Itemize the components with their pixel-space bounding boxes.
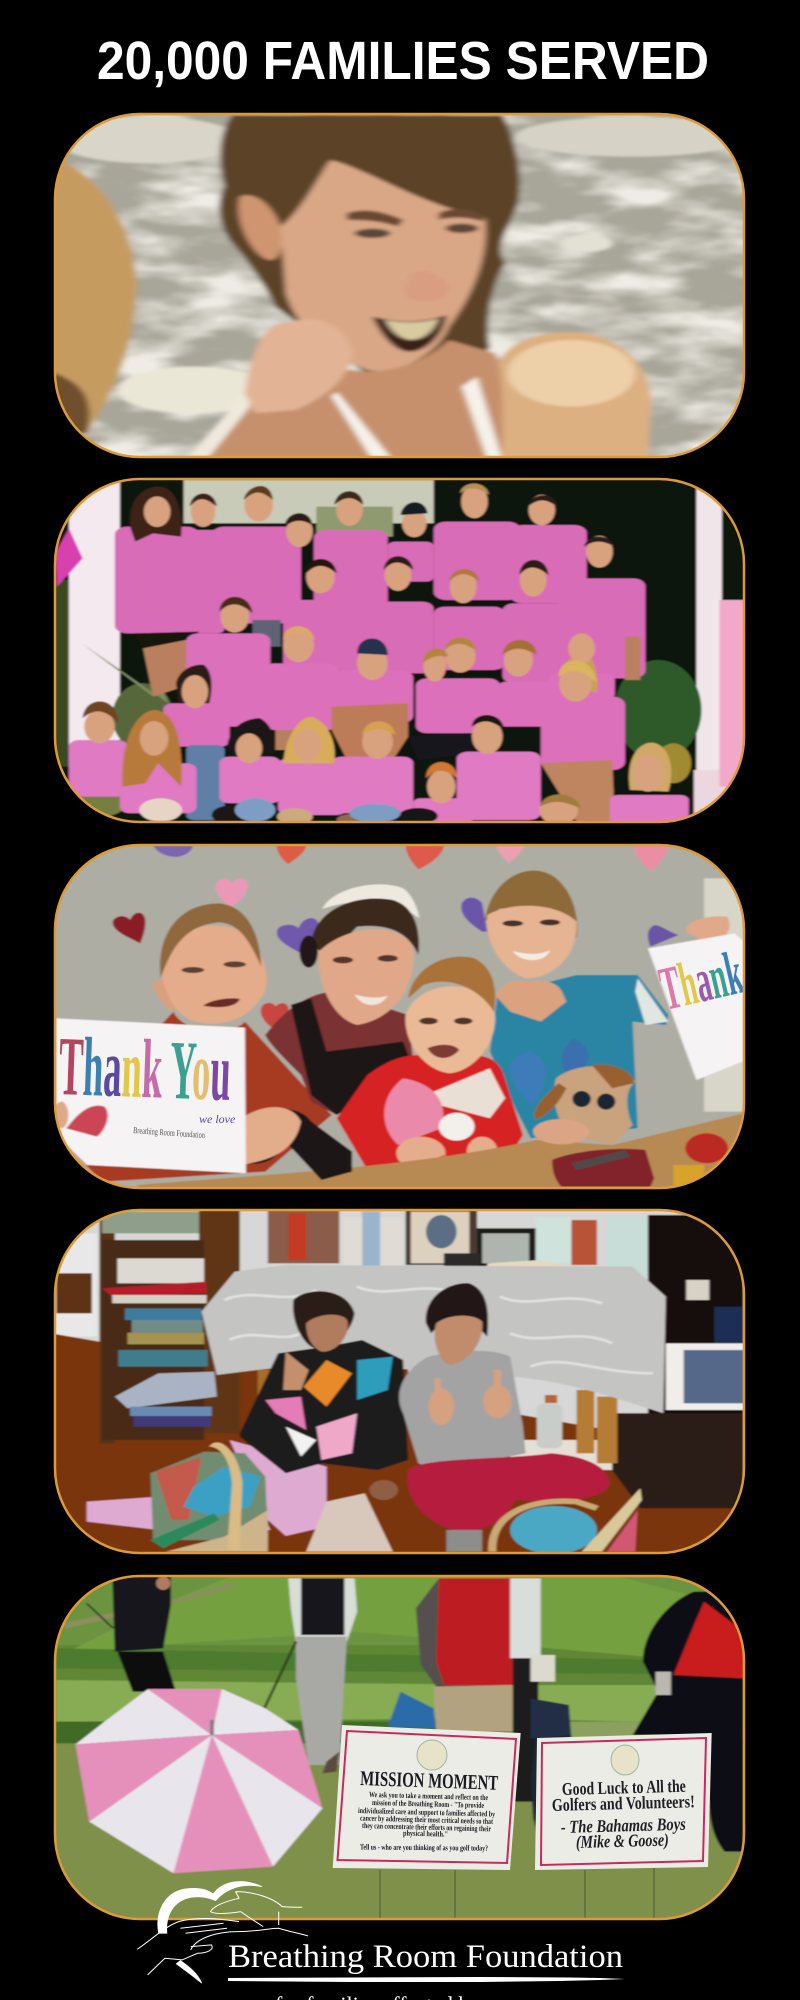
boy on left [56,903,332,1182]
left blurred figure [46,157,137,433]
older girl in teal [485,871,730,1138]
knees and jeans [186,703,615,822]
woman [189,115,520,460]
panel: photo of smiling woman on beach [46,110,760,463]
panel: golf outing with pink umbrella and signs [51,1572,750,1923]
front row children [69,740,689,828]
logo brush underline [228,1977,625,1982]
blond child [490,332,651,460]
shrine items on table [266,1211,648,1278]
title: 20,000 FAMILIES SERVED [97,31,709,91]
sign: mission moment: Tell us - who are you thinking of as you golf today? [360,1843,488,1853]
right gift basket [446,1488,642,1554]
long hair shapes [122,487,671,792]
paper hearts on wall [113,845,679,1028]
right sign paper [648,933,744,1080]
toddler [337,957,523,1170]
girl in patterned hoodie [87,1291,408,1536]
sign: mission moment: they can concentrate their efforts on regaining their [362,1821,491,1833]
sign stakes [380,1868,654,1919]
right thank lettering: Thank [654,939,749,1024]
sign: mission moment: mission of the Breathing Room - "To provide [372,1798,484,1810]
sign: mission moment: cancer by addressing their most critical needs so that [360,1814,493,1826]
water bottle [537,1395,562,1448]
thank you lettering: Thank You [57,1020,232,1119]
sign text: foundation name: Breathing Room Foundation [133,1125,206,1140]
girl in grey shirt [399,1283,610,1532]
middle row children [163,633,625,770]
panel: two girls giving thumbs up with gift baskets [51,1207,750,1557]
porch columns and pink banners [55,480,745,823]
short hair caps [83,484,615,808]
dark cabinet [612,1215,744,1508]
left gift basket [151,1442,268,1552]
sign: good luck: Good Luck to All the [562,1776,686,1799]
logo: heart and hands [137,1881,308,1983]
sign text: we love you: we love [199,1112,236,1126]
notebook on floor [306,1493,393,1552]
sign: mission moment: individualized care and support to families affected by [358,1806,495,1819]
sign: good luck: (Mike & Goose) [576,1830,669,1853]
left sign paper [54,1018,246,1173]
sign: mission moment: We ask you to take a moment and reflect on the [369,1790,488,1802]
legs and shorts [135,620,640,697]
sign: good luck [535,1733,712,1870]
sign: mission moment: physical health." [403,1829,448,1839]
bookshelf [99,1210,240,1443]
sign: mission moment [333,1725,521,1870]
panel: group photo of kids in pink shirts [51,477,750,828]
golfers [87,1577,744,1852]
panel borders [55,114,744,1919]
umbrella [76,1689,322,1873]
plush dog toy [533,1064,635,1145]
faces [84,485,663,825]
girl in centre [265,884,419,1115]
sign: good luck: - The Bahamas Boys [561,1814,686,1837]
tablecloth [202,1265,666,1413]
logo wordmark: Breathing Room Foundation [228,1939,623,1975]
boy's arm [244,1106,354,1180]
chocolate box and candy [552,1133,728,1187]
sign: mission moment: MISSION MOMENT [360,1766,499,1795]
sign: good luck: Golfers and Volunteers! [552,1791,695,1815]
photo collage [666,1343,744,1410]
table [138,1113,744,1190]
panel: four children holding thank you signs [51,842,750,1192]
back row children [115,522,645,683]
table legs [258,1370,617,1463]
plants [80,646,703,816]
pink bear toy [382,1078,498,1163]
seated small heads at bottom edge [138,798,440,821]
